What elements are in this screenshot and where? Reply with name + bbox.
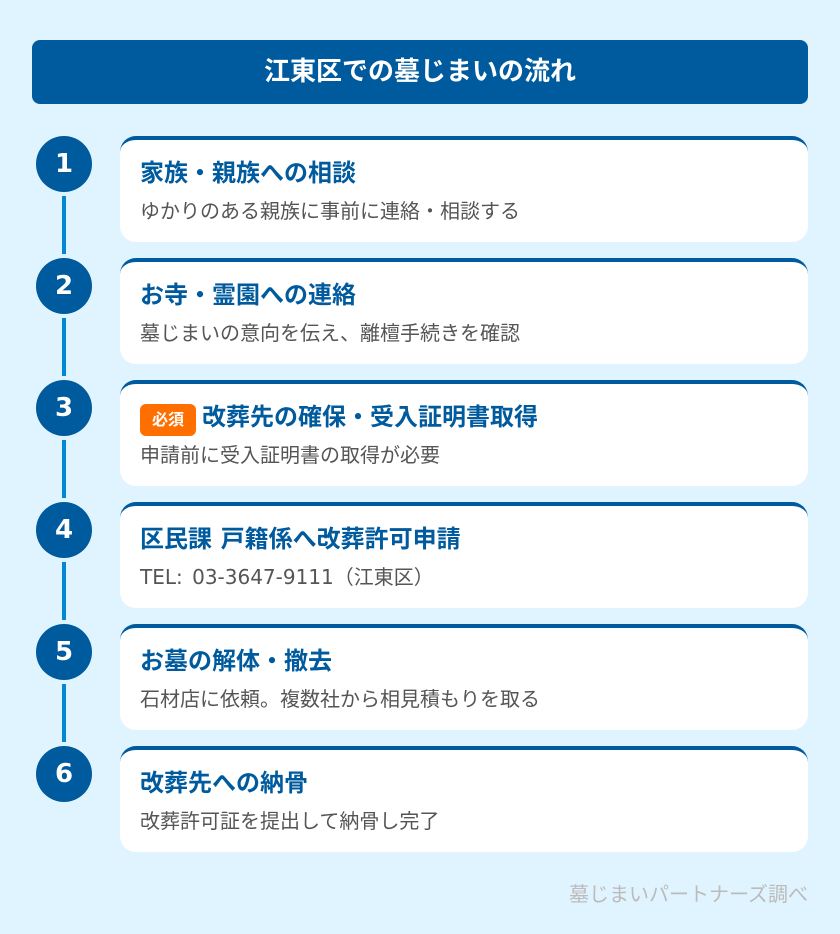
panel: step 1 [120,136,808,242]
step 4 number: 4 [55,515,73,545]
step 2 number: 2 [55,271,73,301]
panel: step 5 [120,624,808,730]
source credit: 墓じまいパートナーズ調べ [569,884,808,906]
step 3 heading: 改葬先の確保・受入証明書取得 [202,404,538,431]
connector 3 to 4 [62,440,66,498]
panel: step 6 [120,746,808,852]
step 3 description: 申請前に受入証明書の取得が必要 [140,445,440,467]
connector 4 to 5 [62,562,66,620]
connector 2 to 3 [62,318,66,376]
step 2 description: 墓じまいの意向を伝え、離檀手続きを確認 [140,323,520,345]
title [32,40,808,104]
step 5 description: 石材店に依頼。複数社から相見積もりを取る [140,689,540,711]
connector 5 to 6 [62,684,66,742]
step 3 number: 3 [55,393,73,423]
panel: step 4 [120,502,808,608]
title: 江東区での墓じまいの流れ [264,56,576,86]
step 6 number [36,746,92,802]
connector 1 to 2 [62,196,66,254]
step 4 number [36,502,92,558]
step 1 number [36,136,92,192]
panel: step 3 [120,380,808,486]
step 3 number [36,380,92,436]
step 1 number: 1 [55,149,73,179]
step 6 description: 改葬許可証を提出して納骨し完了 [140,811,439,833]
step 4 heading: 区民課 戸籍係へ改葬許可申請 [140,526,461,553]
step 4 description: TEL: 03-3647-9111（江東区） [140,565,434,589]
step 5 number [36,624,92,680]
required badge [140,404,196,436]
panel: step 2 [120,258,808,364]
step 6 number: 6 [55,759,73,789]
step 1 heading: 家族・親族への相談 [140,160,356,187]
required badge: 必須 [152,412,184,429]
step 6 heading: 改葬先への納骨 [140,770,308,797]
step 5 number: 5 [55,637,73,667]
step 1 description: ゆかりのある親族に事前に連絡・相談する [140,201,520,223]
step 2 heading: お寺・霊園への連絡 [140,282,356,309]
step 2 number [36,258,92,314]
step 5 heading: お墓の解体・撤去 [140,648,332,675]
